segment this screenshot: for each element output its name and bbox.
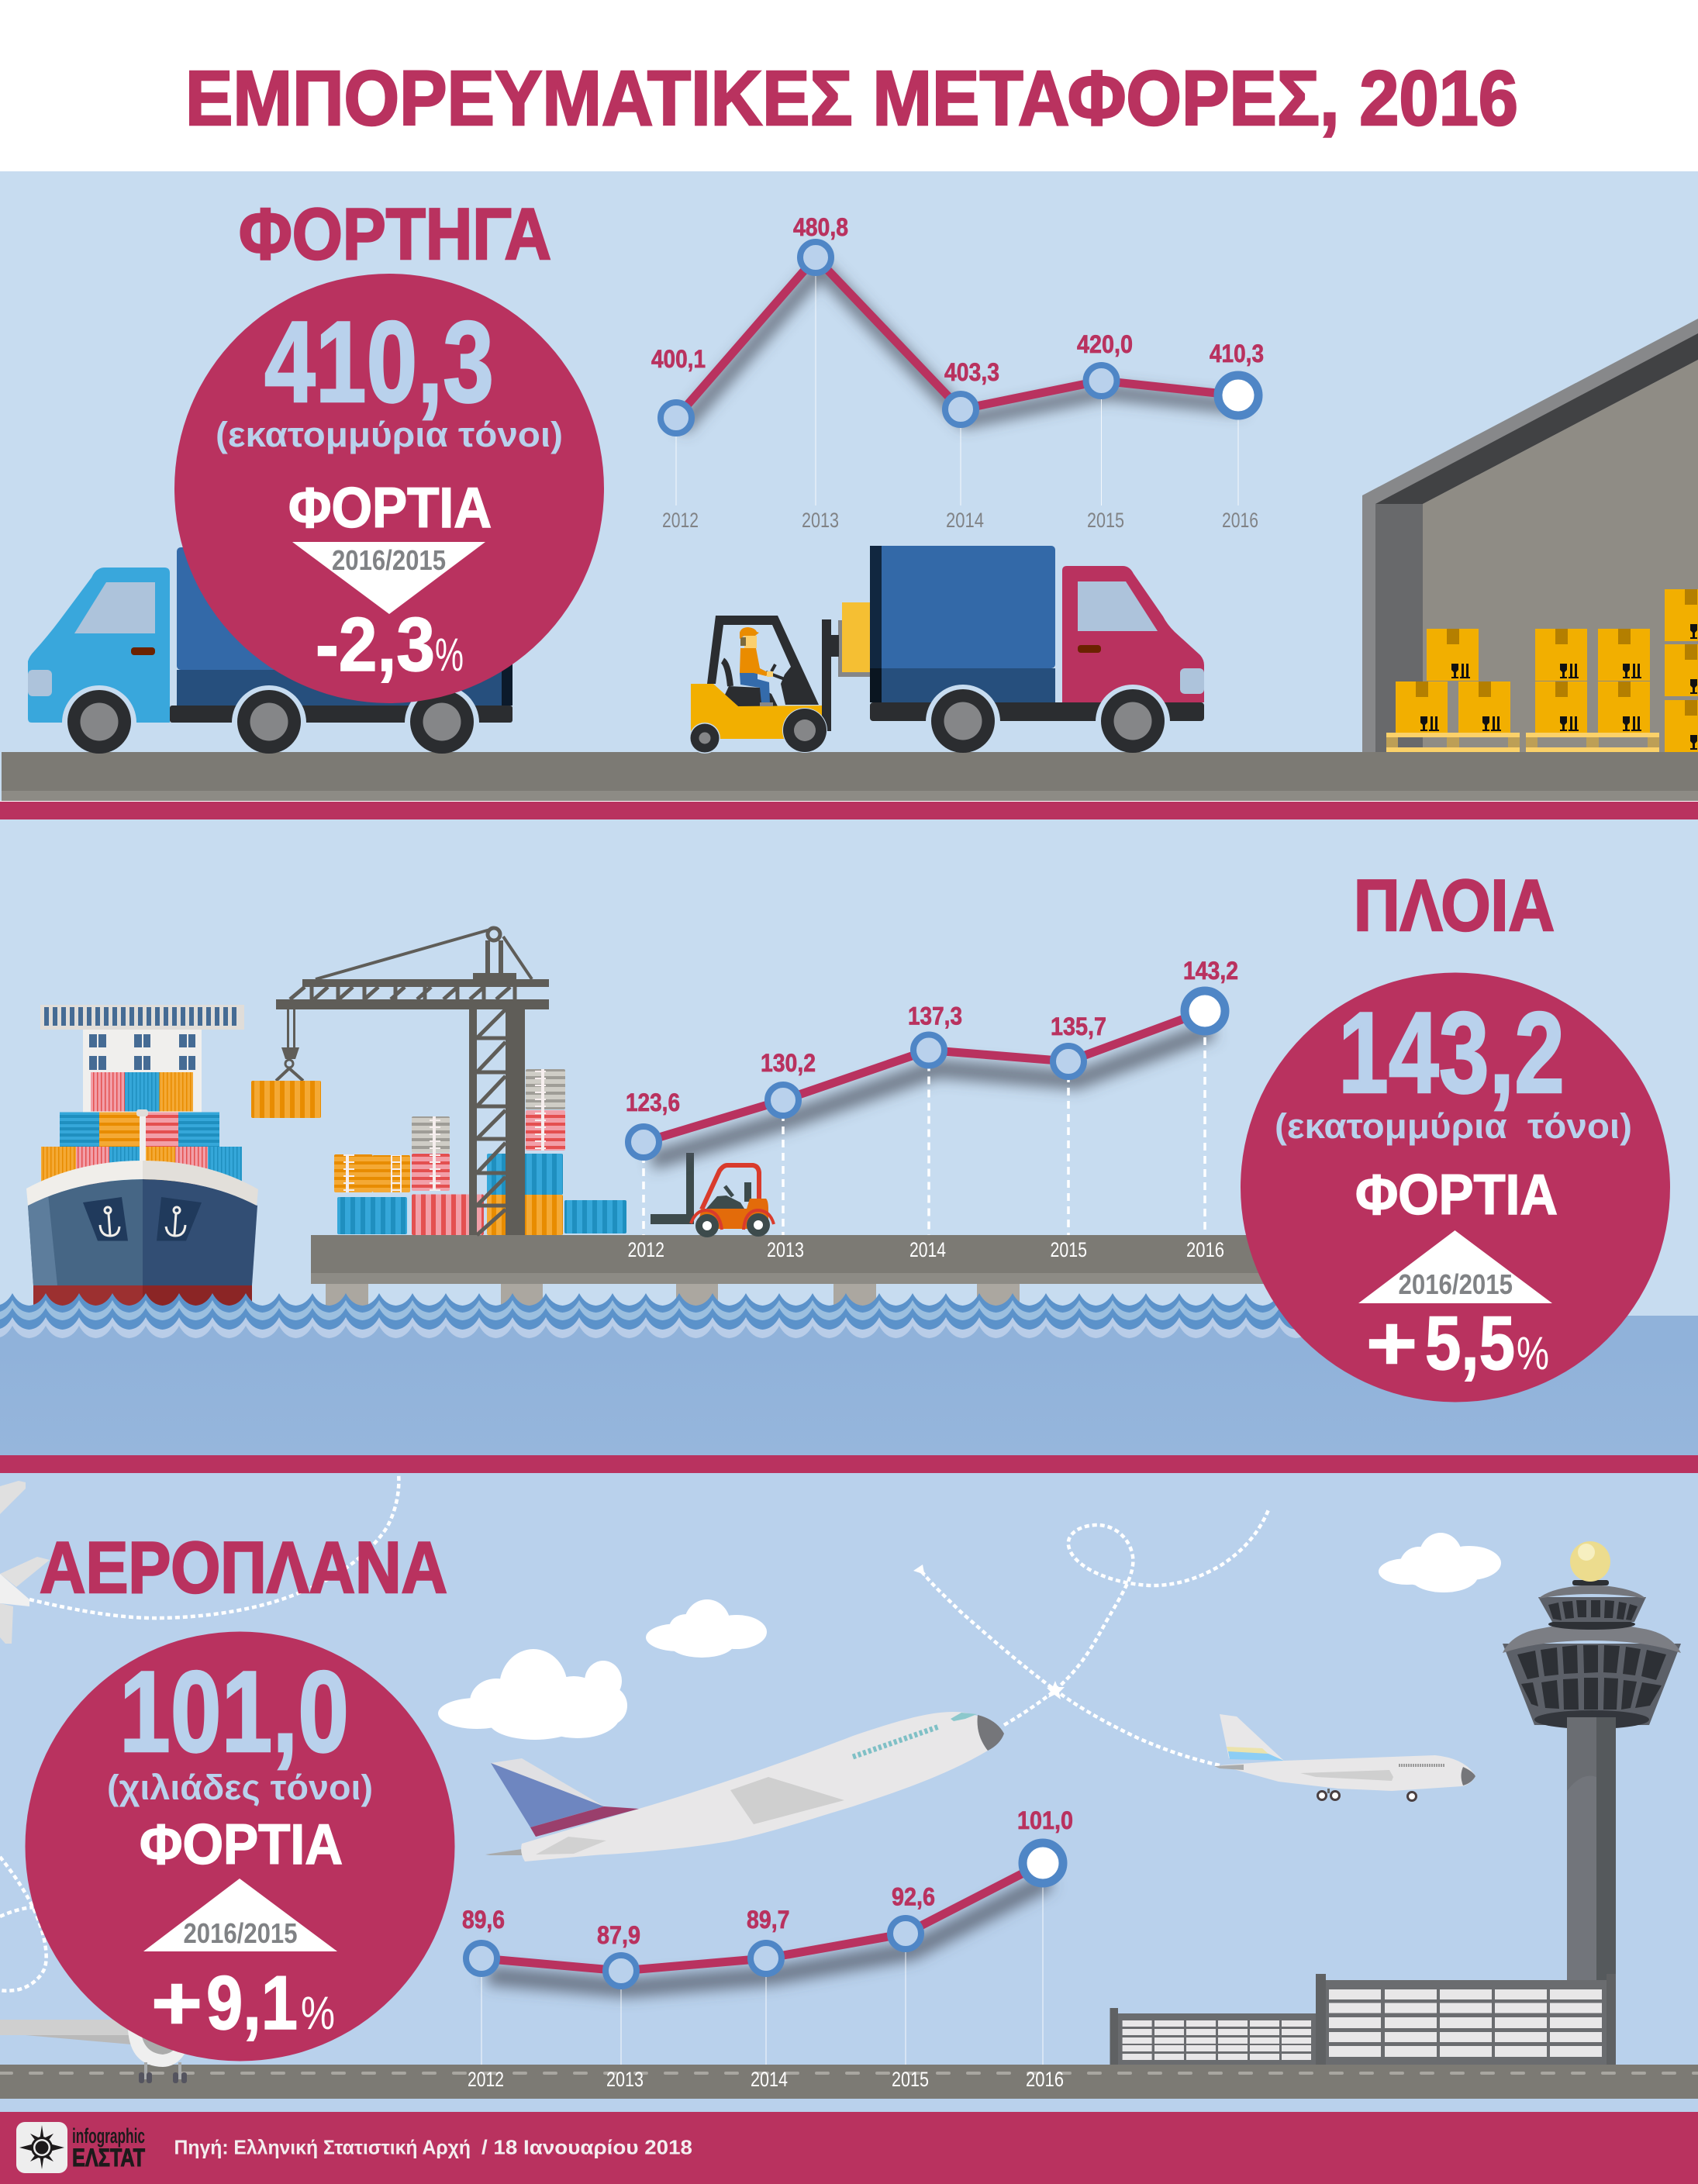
- line chart: airplanes: 101,0: [1017, 1806, 1073, 1834]
- icon: clouds: [438, 1533, 1501, 1740]
- crimson separator bar: [0, 802, 1698, 819]
- line chart: trucks: 410,3: [1210, 340, 1264, 367]
- panel: airplanes stats circle: 101,0: [119, 1647, 349, 1776]
- panel: airplanes stats circle: ΦΟΡΤΙΑ: [140, 1813, 343, 1876]
- icon: container ship: [26, 1005, 258, 1307]
- line chart: airplanes: 2014: [751, 2068, 788, 2091]
- heading: ships: ΠΛΟΙΑ: [1354, 864, 1555, 946]
- line chart: airplanes: 2016: [1026, 2068, 1064, 2091]
- dotted flight paths: [0, 1473, 1269, 1991]
- line chart: airplanes: 2015: [892, 2068, 929, 2091]
- warehouse pallets: [1386, 733, 1659, 752]
- title: ΕΜΠΟΡΕΥΜΑΤΙΚΕΣ ΜΕΤΑΦΟΡΕΣ, 2016: [185, 55, 1518, 142]
- panel: airplanes (αεροπλάνα): [0, 1473, 1698, 2112]
- line chart: ships: 2013: [767, 1238, 804, 1261]
- line chart: airplanes: 2012: [468, 2068, 504, 2091]
- pier: [311, 1235, 1319, 1307]
- panel: trucks stats circle: [174, 274, 604, 703]
- icon: large plane: [485, 1712, 1004, 1861]
- panel: ships stats circle: 5,5: [1425, 1300, 1515, 1385]
- runway: [0, 2065, 1698, 2099]
- line chart: trucks: 480,8: [793, 213, 848, 241]
- icon: forklift with driver: [689, 602, 870, 754]
- line chart: airplanes: 89,7: [747, 1906, 789, 1934]
- line chart: trucks: [651, 213, 1264, 532]
- panel: trucks (φορτηγά): [0, 171, 1698, 819]
- line chart: airplanes: 89,6: [462, 1906, 505, 1934]
- heading: trucks: ΦΟΡΤΗΓΑ: [239, 193, 551, 274]
- icon: blue truck: [28, 547, 513, 754]
- line chart: ships: 2015: [1050, 1238, 1087, 1261]
- line chart: ships: 143,2: [1183, 957, 1238, 985]
- warehouse cargo boxes: [1396, 589, 1698, 752]
- icon: control tower: [1503, 1541, 1681, 1981]
- footer band: [0, 2112, 1698, 2184]
- panel: ships stats circle: %: [1517, 1327, 1549, 1379]
- panel: airplanes stats circle: %: [301, 1987, 335, 2039]
- road: [0, 752, 1698, 802]
- panel: trucks stats circle: 410,3: [264, 297, 494, 426]
- panel: ships stats circle: +: [1366, 1300, 1417, 1385]
- panel: airplanes stats circle: 9,1: [206, 1960, 298, 2045]
- icon: harbour crane: [251, 928, 549, 1235]
- line chart: trucks: 2012: [662, 509, 699, 532]
- icon: crossing star: [1047, 1681, 1065, 1699]
- panel: ships stats circle: 143,2: [1338, 988, 1565, 1117]
- line chart: airplanes: 87,9: [597, 1921, 640, 1949]
- panel: airplanes stats circle: 2016/2015: [183, 1917, 298, 1949]
- line chart: ships: 2014: [909, 1238, 946, 1261]
- panel: trucks stats circle: 2016/2015: [332, 544, 446, 576]
- line chart: ships: 2016: [1186, 1238, 1224, 1261]
- line chart: trucks: 2014: [946, 509, 984, 532]
- line chart: ships: [626, 957, 1238, 1261]
- line chart: ships: 130,2: [761, 1049, 816, 1077]
- source date: / 18 Ιανουαρίου 2018: [481, 2135, 692, 2158]
- line chart: ships: 135,7: [1051, 1013, 1106, 1040]
- panel: trucks stats circle: ΦΟΡΤΙΑ: [288, 477, 492, 540]
- tower windows: [1517, 1645, 1666, 1710]
- source text: Πηγή: Ελληνική Στατιστική Αρχή: [174, 2135, 471, 2158]
- panel: ships stats circle: ΦΟΡΤΙΑ: [1355, 1164, 1558, 1227]
- panel: airplanes stats circle: +: [151, 1960, 202, 2045]
- logo: ΕΛΣΤΑΤ: [16, 2122, 145, 2173]
- heading: airplanes: ΑΕΡΟΠΛΑΝΑ: [40, 1527, 447, 1608]
- panel: ships stats circle: (εκατομμύρια τόνοι): [1275, 1106, 1632, 1146]
- line chart: trucks: 2015: [1087, 509, 1124, 532]
- icon: parked plane lower left: [0, 2020, 192, 2083]
- logo: ΕΛΣΤΑΤ: infographic: [72, 2124, 145, 2148]
- line chart: trucks: 2016: [1222, 509, 1258, 532]
- warehouse: [1362, 319, 1698, 752]
- line chart: trucks: 420,0: [1077, 330, 1133, 358]
- panel: airplanes stats circle: [25, 1631, 454, 2061]
- line chart: trucks: 403,3: [944, 358, 999, 386]
- icon: large terminal: [1316, 1974, 1616, 2065]
- line chart: trucks: 400,1: [651, 345, 706, 373]
- crimson separator bar: [0, 1455, 1698, 1473]
- icon: crimson truck: [870, 546, 1204, 753]
- icon: orange forklift: [651, 1153, 774, 1237]
- hanging container: [251, 1081, 321, 1118]
- icon: small plane on the path: [913, 1565, 925, 1577]
- panel: airplanes stats circle: (χιλιάδες τόνοι): [107, 1768, 373, 1807]
- icon: anchors: [100, 1207, 185, 1236]
- line chart: ships: 123,6: [626, 1089, 680, 1116]
- panel: trucks stats circle: (εκατομμύρια τόνοι): [216, 415, 563, 454]
- stacked containers: [334, 1069, 626, 1235]
- line chart: trucks: 2013: [802, 509, 839, 532]
- panel: ships stats circle: [1241, 972, 1670, 1402]
- line chart: ships: 137,3: [908, 1002, 962, 1030]
- sea with waves: [0, 1293, 1698, 1455]
- line chart: ships: 2012: [628, 1238, 664, 1261]
- panel: ships (πλοία): [0, 819, 1698, 1455]
- icon: partial plane top left: [0, 1481, 50, 1644]
- line chart: airplanes: [462, 1806, 1073, 2091]
- icon: small terminal: [1110, 2008, 1316, 2065]
- panel: trucks stats circle: -2,3: [316, 602, 435, 687]
- panel: ships stats circle: 2016/2015: [1399, 1268, 1513, 1300]
- line chart: airplanes: 92,6: [892, 1882, 935, 1910]
- panel: trucks stats circle: %: [435, 629, 464, 681]
- logo: ΕΛΣΤΑΤ: ΕΛΣΤΑΤ: [72, 2144, 145, 2172]
- icon: small plane: [1214, 1714, 1475, 1800]
- line chart: airplanes: 2013: [606, 2068, 644, 2091]
